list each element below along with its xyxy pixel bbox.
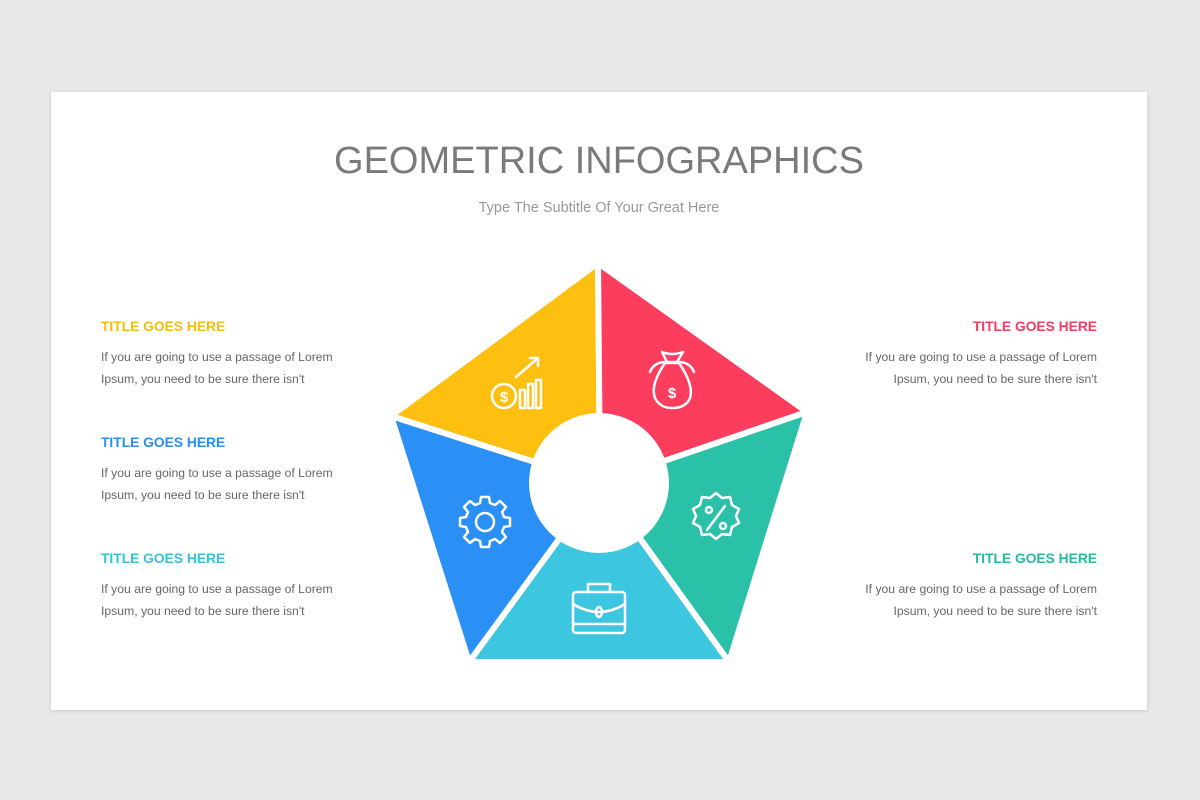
- left text block 3: TITLE GOES HERE: [101, 551, 225, 566]
- segment: blue: [391, 416, 600, 662]
- right text block 2: [865, 551, 1097, 618]
- icon: gear: [460, 497, 510, 547]
- icon: money bag: [650, 352, 694, 408]
- icon: money bag: $: [668, 385, 677, 402]
- left text block 1: If you are going to use a passage of Lorem Ipsum, you need to be sure there isn't: [101, 350, 333, 386]
- left text block 2: If you are going to use a passage of Lorem Ipsum, you need to be sure there isn't: [101, 466, 333, 502]
- left text block 1: TITLE GOES HERE: [101, 319, 225, 334]
- left text block 3: If you are going to use a passage of Lorem Ipsum, you need to be sure there isn't: [101, 582, 333, 618]
- left text block 2: TITLE GOES HERE: [101, 435, 225, 450]
- right text block 1: If you are going to use a passage of Lorem Ipsum, you need to be sure there isn't: [865, 350, 1097, 386]
- left text block 1: [101, 319, 333, 386]
- left text block 2: [101, 435, 333, 502]
- icon: briefcase: [573, 584, 625, 633]
- center circle: [529, 413, 669, 553]
- right text block 2: If you are going to use a passage of Lorem Ipsum, you need to be sure there isn't: [865, 582, 1097, 618]
- icon: coin growth: $: [500, 389, 509, 406]
- segment: cyan: [469, 483, 729, 662]
- subtitle: Type The Subtitle Of Your Great Here: [479, 200, 719, 216]
- card panel: [51, 92, 1147, 710]
- right text block 2: TITLE GOES HERE: [973, 551, 1097, 566]
- right text block 1: TITLE GOES HERE: [973, 319, 1097, 334]
- right text block 1: [865, 319, 1097, 386]
- segment: green: [600, 412, 807, 662]
- title: GEOMETRIC INFOGRAPHICS: [334, 140, 864, 182]
- segment: yellow: [391, 263, 600, 483]
- icon: coin growth: [492, 358, 541, 408]
- segment: red: [598, 263, 807, 483]
- icon: percent badge: [693, 493, 739, 539]
- left text block 3: [101, 551, 333, 618]
